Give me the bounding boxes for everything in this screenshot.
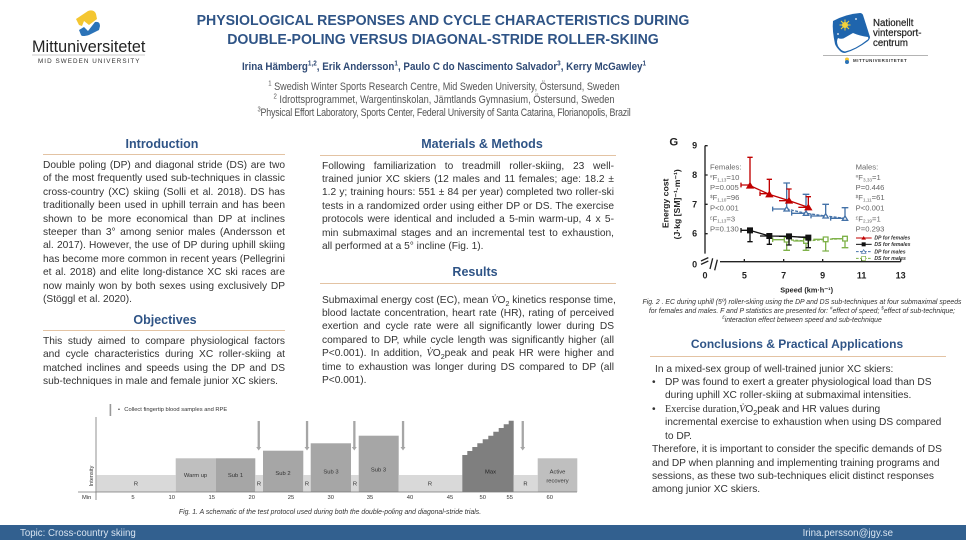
series: DS for males — [773, 236, 848, 251]
statistics: females: # — [710, 174, 713, 179]
statistics: males: =1 — [872, 173, 881, 182]
axis tick labels: 11 — [857, 271, 866, 281]
text: Results: exertion and cycle rate were all significantly lower during DS — [322, 321, 614, 332]
minute labels: 40 — [407, 495, 413, 501]
authors: Irina Hämberg1,2, Erik Andersson1, Paulo C do Nascimento Salvador3, Kerry McGawley1 — [242, 60, 646, 73]
axis tick labels: 13 — [896, 271, 906, 281]
protocol stages: R — [523, 482, 528, 488]
text: Conclusions: Exercise duration,V̇O2peak and HR values during — [665, 404, 880, 417]
statistics: females: $ — [710, 194, 713, 199]
axis titles — [661, 169, 834, 294]
text: Introduction: steeper than 3° among senior males (Andersson et — [43, 227, 285, 238]
text: Conclusions: and DP when planning and implementing training programs and — [652, 458, 940, 469]
statistics: males: £ — [856, 215, 859, 220]
affiliation 2: 2 Idrottsprogrammet, Wargentinskolan, Jämtlands Gymnasium, Östersund, Sweden — [273, 93, 615, 106]
statistics: males: $ — [856, 194, 859, 199]
statistics: males: F — [858, 173, 863, 182]
text: Results: time to exhaustion was longer during DS compared to DP (all — [322, 362, 614, 373]
text: Results: P<0.001). — [322, 375, 366, 386]
text: Introduction: et al. 2018) and elite long-distance XC ski races are — [43, 267, 285, 278]
text: Materials and Methods: protocols were identical and included a 5-min warm-up, 4 x 5- — [322, 214, 614, 225]
legend: DS for males — [874, 256, 906, 262]
minute labels: 5 — [131, 495, 135, 501]
axis tick labels: 9 — [820, 271, 825, 281]
statistics: males: F — [858, 214, 863, 223]
axes — [701, 146, 901, 270]
text: Materials and Methods: 1.2 y; training hours: 551 ± 84 per year) completed two roller-ski — [322, 187, 614, 198]
statistics: females: F — [713, 214, 718, 223]
series: DP for females — [741, 157, 811, 210]
protocol stages: R — [257, 482, 261, 488]
text: Conclusions: • — [652, 377, 656, 388]
footer bar — [0, 525, 966, 540]
logo: Mid Sweden University — [32, 10, 146, 64]
text: Objectives: sub-techniques in male and female junior XC skiers. — [43, 376, 278, 387]
minute labels: 60 — [546, 495, 553, 501]
text: Conclusions: Therefore, it is important to consider the specific demands of DS — [652, 444, 942, 455]
logo small tagline: MITTUNIVERSITETET — [853, 58, 907, 63]
sampling arrows — [256, 421, 525, 450]
affiliation 1: 1 Swedish Winter Sports Research Centre, Mid Sweden University, Östersund, Sweden — [268, 80, 620, 93]
statistics: females: 1,13 — [717, 177, 727, 182]
axes — [78, 417, 577, 500]
axis tick labels: 6 — [692, 229, 697, 239]
statistics: males: Males: — [856, 163, 878, 172]
series: DS for females — [741, 228, 811, 248]
text: Conclusions: during uphill XC roller-skiing at submaximal intensities. — [665, 390, 911, 401]
title: DOUBLE-POLING VERSUS DIAGONAL-STRIDE ROLLER-SKIING — [227, 31, 659, 48]
minute labels: 50 — [479, 495, 486, 501]
caption: figure 2: for females and males. F and P statistics are presented for: #effect of speed; $effect of sub-technique; — [649, 306, 955, 315]
minute labels: 10 — [168, 495, 175, 501]
text: Conclusions: among junior XC skiers. — [652, 484, 760, 495]
axis titles: (J·kg [SM]⁻¹·m⁻¹) — [672, 169, 682, 239]
statistics: males: F — [858, 193, 863, 202]
protocol stages: Warm up — [184, 473, 207, 479]
protocol stages: R — [428, 482, 432, 488]
text: Introduction: of the most frequently used sub-techniques in classic — [43, 173, 285, 184]
text: Objectives: matched inclines and speeds using the DP and DS — [43, 363, 285, 374]
protocol stages: Sub 3 — [323, 470, 339, 476]
minute labels: 45 — [447, 495, 453, 501]
text: Introduction: shown to be more economical than DP at inclines — [43, 214, 285, 225]
minute labels: 15 — [208, 495, 215, 501]
axis tick labels: 0 — [702, 271, 708, 281]
text: Introduction: traditionally been used in uphill terrain and has been — [43, 200, 285, 211]
axis tick labels: 7 — [781, 271, 786, 281]
text: Objectives: This study aimed to compare physiological factors — [43, 336, 285, 347]
caption: figure 1: Fig. 1. A schematic of the test protocol used during both the double-poling and diagonal-stride trials. — [179, 508, 481, 516]
minute labels: 30 — [327, 495, 334, 501]
protocol stages: Max — [485, 470, 496, 476]
statistics: males: P=0.446 — [856, 183, 884, 192]
minute labels — [82, 495, 553, 501]
text: Materials and Methods: Following familiarization to treadmill roller-skiing, 23 well- — [322, 160, 614, 172]
text: Conclusions: incremental exercise to exhaustion when using DS compared — [665, 417, 941, 428]
statistics: females: P=0.130 — [710, 225, 739, 234]
statistics: females: Females: — [710, 163, 742, 172]
text: Introduction: has become more common in recent years (Pellegrini — [43, 254, 285, 265]
wordmark: Mittuniversitetet — [32, 38, 145, 56]
protocol stages: Sub 1 — [228, 473, 243, 479]
text: Results — [322, 294, 616, 386]
logo wordmark: centrum — [873, 38, 908, 49]
affiliation 3: 3Physical Effort Laboratory, Sports Center, Federal University of Santa Catarina, Florianopolis, Brazil — [258, 106, 630, 118]
text: Conclusions: to DP. — [665, 431, 692, 442]
text: Conclusions — [652, 364, 942, 495]
axis tick labels: 7 — [692, 199, 697, 209]
text: Introduction: (Stöggl et al. 2020). — [43, 294, 132, 305]
caption: figure 2: £interaction effect between speed and sub-technique — [722, 315, 882, 324]
logo wordmark: vintersport- — [873, 28, 921, 39]
text: Introduction: cross-country (XC) skiing (Solli et al. 2018). DS has — [43, 187, 285, 198]
text: Materials and Methods: all performed at a 5° incline (Fig. 1). — [322, 241, 483, 252]
protocol stages: recovery — [546, 478, 569, 484]
protocol stages: Sub 2 — [275, 471, 291, 477]
protocol stages: R — [134, 482, 138, 488]
statistics: males: # — [856, 174, 859, 179]
text: Materials and Methods: tests in a randomized order using either DP or DS. The exercise — [322, 201, 614, 212]
heading: Introduction: Introduction — [126, 137, 198, 151]
statistics: males: 1,11 — [863, 197, 872, 202]
logo wordmark — [872, 18, 922, 49]
panel letter: G — [669, 137, 678, 149]
text: Objectives: and cycle characteristics during XC roller-skiing at — [43, 349, 285, 360]
axis tick labels: 8 — [692, 170, 697, 180]
text: Objectives — [43, 336, 285, 387]
statistics: females: F — [713, 193, 718, 202]
statistics: males: =1 — [872, 214, 881, 223]
legend: blood samples and RPE: Collect fingertip blood samples and RPE — [124, 407, 227, 413]
text: Results: compared to DP, while cycle length was significantly higher (all — [322, 335, 614, 346]
protocol stages: Active — [550, 470, 565, 476]
legend: DP for females — [874, 236, 910, 242]
caption: figure 2 — [642, 298, 962, 324]
axis tick labels: 0 — [692, 259, 697, 269]
text: Introduction: al. 2017). However, the use of DP during uphill skiing — [43, 240, 285, 251]
title: PHYSIOLOGICAL RESPONSES AND CYCLE CHARACTERISTICS DURING — [197, 12, 689, 29]
protocol stages — [97, 421, 577, 492]
text: Results: P<0.001). In addition, V̇O2peak and peak HR were higher and — [322, 348, 614, 361]
protocol stages: R — [353, 482, 357, 488]
logo: Nationellt vintersportcentrum — [823, 13, 928, 64]
axis titles: Energy cost — [661, 178, 671, 228]
text: Results: blood lactate concentration, heart rate (HR), rating of perceived — [322, 308, 614, 319]
text: Introduction — [43, 160, 285, 305]
statistics: females: =3 — [726, 214, 735, 223]
legend: DS for females — [874, 242, 911, 248]
footer email: Irina.persson@jgy.se — [803, 528, 893, 539]
protocol stages: R — [305, 482, 309, 488]
text: Conclusions: DP was found to exert a greater physiological load than DS — [665, 377, 932, 388]
text: Conclusions: sessions, as these two sub-techniques elicit distinct responses — [652, 471, 934, 482]
heading: Objectives: Objectives — [133, 312, 197, 326]
axis tick labels — [692, 141, 906, 281]
statistics: males: 2,19 — [863, 219, 872, 224]
series: DP for males — [773, 183, 848, 221]
statistics: males: P=0.293 — [856, 225, 884, 234]
text: Materials and Methods — [322, 160, 614, 252]
statistics: males — [856, 163, 885, 234]
caption: figure 2: Fig. 2 . EC during uphill (5º) roller-skiing using the DP and DS sub-techniques at four submaximal speeds — [643, 299, 961, 306]
text: Introduction: now mainly won by both sexes using exclusively DP — [43, 281, 285, 292]
heading: Materials and Methods: Materials & Methods — [421, 137, 543, 151]
statistics: females: F — [713, 173, 718, 182]
minute labels: 20 — [248, 495, 255, 501]
minute labels: 25 — [288, 495, 294, 501]
footer topic: Topic: Cross-country skiing — [20, 528, 136, 539]
text: Introduction: Double poling (DP) and diagonal stride (DS) are two — [43, 160, 285, 171]
legend: blood samples and RPE: • — [118, 407, 120, 413]
statistics: females: P<0.001 — [710, 204, 739, 213]
minute labels: 35 — [367, 495, 373, 501]
text: Conclusions: In a mixed-sex group of well-trained junior XC skiers: — [655, 364, 893, 374]
protocol stages: Sub 3 — [371, 468, 386, 474]
statistics: females: P=0.005 — [710, 183, 739, 192]
axis tick labels: 9 — [692, 141, 697, 151]
title — [197, 12, 689, 48]
statistics: males: =61 — [872, 193, 885, 202]
chart: test protocol schematic — [78, 404, 578, 501]
legend: blood samples and RPE — [110, 404, 227, 416]
minute labels: 55 — [506, 495, 513, 501]
text: Materials and Methods: trained junior XC skiers (12 males and 11 females; age: 18.2 ± — [322, 174, 614, 185]
statistics: females: 1,10 — [717, 197, 727, 202]
text: Conclusions: • — [652, 404, 656, 415]
text: Materials and Methods: min submaximal stages and an incremental test to exhaustion, — [322, 228, 614, 239]
intensity axis label: Intensity — [89, 465, 95, 486]
logo wordmark: Nationellt — [873, 18, 913, 28]
heading: Conclusions: Conclusions & Practical Applications — [691, 337, 903, 351]
tagline: MID SWEDEN UNIVERSITY — [38, 58, 141, 64]
statistics: females: 1,13 — [717, 219, 727, 224]
statistics: males: 3,33 — [863, 177, 872, 182]
statistics: females — [710, 163, 742, 234]
axis tick labels: 5 — [742, 271, 747, 281]
axis titles: Speed (km·h⁻¹) — [780, 285, 834, 294]
minute labels: Min — [82, 495, 91, 501]
legend — [856, 236, 911, 262]
text: Results: Submaximal energy cost (EC), mean V̇O2 kinetics response time, — [322, 294, 616, 308]
statistics: males: P<0.001 — [856, 204, 884, 213]
statistics: females: =96 — [726, 193, 739, 202]
statistics: females: =10 — [726, 173, 739, 182]
legend: DP for males — [874, 249, 906, 255]
statistics: females: £ — [710, 215, 713, 220]
chart: energy cost vs speed — [661, 137, 911, 294]
heading: Results: Results — [452, 265, 498, 279]
